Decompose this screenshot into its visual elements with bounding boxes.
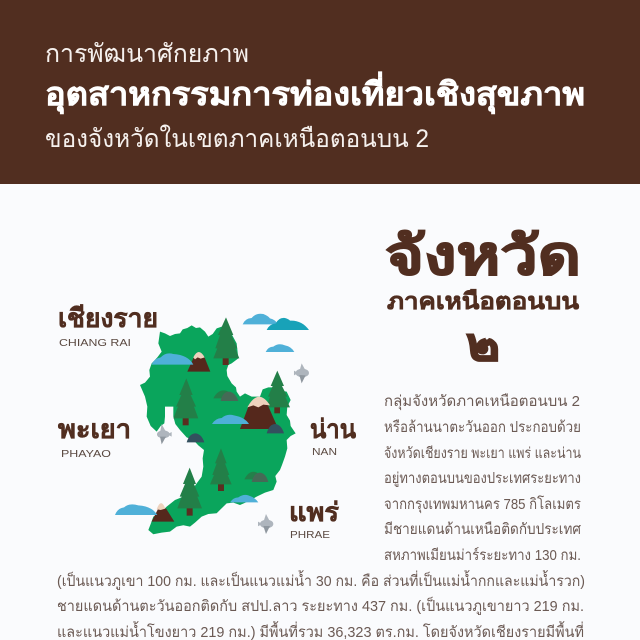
label: Chiang Rai: CHIANG RAI (59, 337, 131, 349)
label: Phayao: PHAYAO (61, 448, 111, 460)
body paragraph: กลุ่มจังหวัดภาคเหนือตอนบน 2 (384, 393, 580, 411)
label: Phrae: แพร่ (289, 497, 339, 527)
label: Phrae (289, 497, 339, 541)
heading: numeral two: ๒ (466, 318, 500, 370)
trees (173, 317, 290, 516)
heading: provinces: จังหวัด (385, 226, 581, 286)
heading: provinces (385, 226, 581, 370)
label: Chiang Rai: เชียงราย (58, 303, 158, 333)
header banner (0, 0, 640, 184)
body paragraph (57, 393, 585, 640)
body paragraph: หรือล้านนาตะวันออก ประกอบด้วย (384, 419, 581, 436)
heading: upper north: ภาคเหนือตอนบน (387, 288, 579, 314)
body paragraph: จากกรุงเทพมหานคร 785 กิโลเมตร (384, 495, 581, 514)
label: Phayao (58, 414, 131, 460)
header line 3: ของจังหวัดในเขตภาคเหนือตอนบน 2 (45, 124, 429, 153)
clouds (115, 314, 309, 515)
body paragraph: ชายแดนด้านตะวันออกติดกับ สปป.ลาว ระยะทาง 437 กม. (เป็นแนวภูเขายาว 219 กม. (57, 596, 584, 615)
map of the four provinces (115, 314, 309, 534)
label: Nan (310, 414, 356, 458)
birds (157, 363, 309, 534)
mountains (152, 352, 278, 522)
header title: อุตสาหกรรมการท่องเที่ยวเชิงสุขภาพ (45, 71, 585, 115)
body paragraph: อยู่ทางตอนบนของประเทศระยะทาง (384, 470, 581, 487)
body paragraph: จังหวัดเชียงราย พะเยา แพร่ และน่าน (384, 445, 581, 462)
map land (140, 325, 296, 534)
label: Chiang Rai (58, 303, 158, 349)
hills (187, 390, 284, 482)
header line 1: การพัฒนาศักยภาพ (45, 40, 249, 68)
label: Nan: น่าน (310, 414, 356, 444)
body paragraph: มีชายแดนด้านเหนือติดกับประเทศ (384, 521, 581, 538)
label: Nan: NAN (312, 446, 337, 458)
body paragraph: (เป็นแนวภูเขา 100 กม. และเป็นแนวแม่น้ำ 30 กม. คือ ส่วนที่เป็นแม่น้ำกกและแม่น้ำรวก) (57, 570, 585, 590)
label: Phrae: PHRAE (290, 529, 330, 541)
label: Phayao: พะเยา (58, 414, 131, 444)
body paragraph: สหภาพเมียนม่าร์ระยะทาง 130 กม. (384, 547, 581, 564)
